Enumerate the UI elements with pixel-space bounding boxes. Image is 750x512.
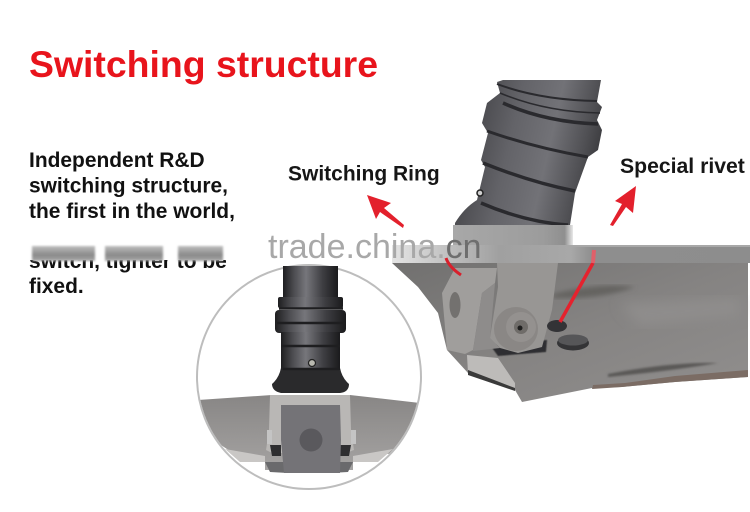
dark area behind hinge xyxy=(490,340,547,356)
watermark text: trade.china.cn xyxy=(268,228,482,266)
blurred watermark patch over text xyxy=(32,246,223,261)
serrated edge xyxy=(592,370,748,389)
blade shadow streaks xyxy=(553,286,635,298)
inset pivot bolt xyxy=(300,428,322,452)
arrow: special rivet xyxy=(560,186,636,322)
text block: description xyxy=(29,149,235,298)
inset grooves xyxy=(277,308,345,369)
inset middle ring xyxy=(275,310,346,333)
photo: angled handle xyxy=(454,80,602,263)
lighter blade reflection xyxy=(620,298,740,326)
watermark band xyxy=(392,225,750,263)
inset blade xyxy=(198,395,420,470)
bracket side xyxy=(473,283,500,351)
inset u-bracket xyxy=(266,395,354,453)
inset top collar xyxy=(278,297,343,308)
bracket hole xyxy=(450,292,460,318)
text block: description: switching structure, xyxy=(29,174,228,198)
inset side screws xyxy=(267,430,272,444)
lower left folded edge xyxy=(467,355,515,390)
arrow: switching ring xyxy=(367,195,461,275)
special rivets xyxy=(547,320,589,350)
label: special rivet: Special rivet xyxy=(620,155,745,178)
text block: description: the first in the world, xyxy=(29,200,235,223)
inset handle tube xyxy=(283,266,338,298)
blurred text line: switch, tighter to be xyxy=(29,250,227,273)
inset circle: front view of hinge xyxy=(197,265,421,489)
inset flared base xyxy=(272,368,349,393)
inset pivot block xyxy=(281,405,341,473)
text block: description: Independent R&D xyxy=(29,149,205,172)
ring grooves xyxy=(481,84,600,225)
handle silhouette xyxy=(454,80,602,263)
inset lower ring xyxy=(281,332,340,370)
side screw xyxy=(477,190,483,196)
inset bracket dark gaps xyxy=(270,445,351,456)
hinge plate xyxy=(490,263,558,353)
pivot screw xyxy=(494,307,538,351)
pivot bracket xyxy=(442,268,497,354)
inset blade lower edge xyxy=(225,449,393,462)
shovel blade xyxy=(392,263,748,402)
photo: angled shovel head xyxy=(392,263,748,402)
inset lower feet xyxy=(265,462,353,473)
label: switching ring: Switching Ring xyxy=(288,162,440,186)
text block: description: fixed. xyxy=(29,275,84,298)
inset handle screw xyxy=(308,360,316,366)
title: Switching structure xyxy=(29,43,378,85)
